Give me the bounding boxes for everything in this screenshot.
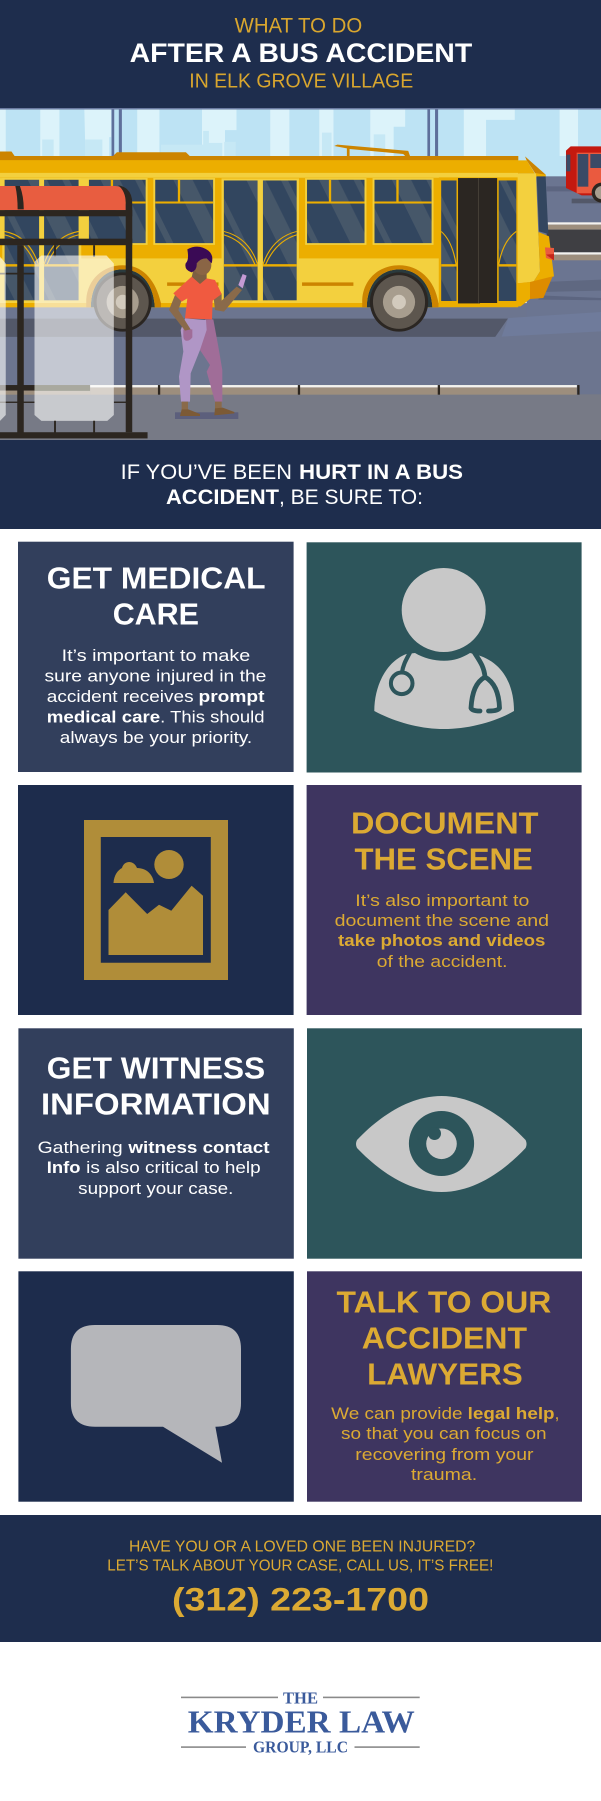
yellow trolley bus (0, 145, 518, 332)
background road and barrier, right side (502, 176, 601, 337)
logo: the kryder law group: THE (283, 1688, 318, 1707)
body text: witness contact (127, 1138, 270, 1157)
body text: always be your priority. (60, 728, 252, 747)
heading: DOCUMENT (351, 805, 539, 840)
body text (44, 646, 266, 747)
heading (351, 805, 539, 876)
footer call to action (0, 1515, 601, 1642)
heading: CARE (113, 597, 199, 632)
heading (336, 1285, 551, 1392)
body text: so that you can focus on (341, 1424, 547, 1443)
phone (238, 274, 247, 288)
body text: of the accident. (377, 952, 508, 971)
icon: framed picture (84, 820, 228, 980)
body text: document the scene and (335, 911, 549, 930)
body text: . This should (160, 708, 264, 727)
window arcs (5, 231, 297, 264)
header banner (0, 0, 601, 108)
body text: legal help (468, 1404, 555, 1423)
call to action text (107, 1538, 493, 1574)
logo: the kryder law group: GROUP, LLC (253, 1738, 348, 1757)
bus front end (480, 156, 554, 307)
panel: get witness information (18, 1028, 294, 1259)
body text: take photos and videos (338, 931, 545, 950)
roof equipment (334, 145, 410, 156)
heading (47, 561, 266, 632)
body text: prompt (198, 687, 265, 706)
panel: doctor icon (307, 542, 582, 772)
arms (169, 287, 242, 331)
body text: is also critical to help (86, 1158, 261, 1177)
body text: It’s also important to (355, 891, 529, 910)
heading: LAWYERS (367, 1357, 523, 1392)
heading: TALK TO OUR (336, 1285, 551, 1320)
legs (200, 319, 222, 402)
heading: ACCIDENT (362, 1321, 527, 1356)
title line: what to do: WHAT TO DO (235, 14, 362, 37)
illustration: bus stop scene (0, 108, 601, 441)
body text (331, 1404, 559, 1484)
heading: THE SCENE (354, 841, 533, 876)
title line: after a bus accident: AFTER A BUS ACCIDENT (130, 38, 472, 68)
body text: sure anyone injured in the (44, 667, 266, 686)
curb (0, 385, 580, 395)
sky and skyline (0, 108, 601, 176)
body text: , (555, 1404, 559, 1423)
body text: support your case. (78, 1179, 233, 1198)
body text: medical care (47, 708, 160, 727)
door (439, 177, 518, 305)
logo: the kryder law group (181, 1688, 420, 1757)
call to action text: HAVE YOU OR A LOVED ONE BEEN INJURED? (129, 1538, 476, 1555)
heading: INFORMATION (41, 1087, 271, 1122)
body text: Gathering (38, 1138, 123, 1157)
band: intro text: IF YOU’VE BEEN (121, 459, 292, 484)
body text: accident receives (47, 687, 194, 706)
red bus in the distance (566, 146, 601, 203)
glass panels (34, 256, 114, 421)
icon: speech bubble (71, 1325, 241, 1463)
wheel arches (367, 269, 432, 307)
body text: trauma. (411, 1465, 477, 1484)
icon: eye (356, 1096, 527, 1192)
windows (0, 178, 434, 302)
shirt (173, 277, 222, 319)
panel: document the scene (307, 785, 582, 1015)
ground shadow (175, 412, 238, 419)
wheel: front (370, 272, 428, 332)
body text: Info (47, 1158, 80, 1177)
panel: photo icon (18, 785, 294, 1015)
head (194, 258, 212, 275)
band: intro text: HURT IN A BUS (299, 459, 463, 484)
panel: talk to our accident lawyers (307, 1271, 582, 1502)
shoes (182, 402, 222, 410)
heading: GET WITNESS (47, 1051, 265, 1086)
panel: eye icon (307, 1028, 582, 1259)
wheel: rear (94, 272, 152, 332)
bus body (0, 156, 518, 307)
body text: It’s important to make (62, 646, 250, 665)
band: intro text (0, 440, 601, 529)
body text: We can provide (331, 1404, 463, 1423)
bus shelter (0, 185, 148, 438)
band: intro text: , BE SURE TO: (279, 484, 423, 509)
neck (192, 270, 207, 285)
phone number: (312) 223-1700 (172, 1581, 429, 1618)
body text (38, 1138, 270, 1198)
body text: recovering from your (355, 1445, 534, 1464)
panel: get medical care (18, 542, 294, 772)
person holding a phone (169, 247, 247, 419)
band: intro text: ACCIDENT (166, 484, 279, 509)
icon: doctor with stethoscope (374, 568, 514, 729)
panel: speech bubble icon (18, 1271, 294, 1502)
heading: GET MEDICAL (47, 561, 266, 596)
side panels (302, 282, 353, 286)
logo: the kryder law group: KRYDER LAW (188, 1704, 415, 1740)
call to action text: LET’S TALK ABOUT YOUR CASE, CALL US, IT’S FREE! (107, 1557, 493, 1574)
heading (41, 1051, 271, 1122)
trim (1, 258, 438, 259)
body text (335, 891, 549, 971)
title line: in elk grove village: IN ELK GROVE VILLAGE (189, 70, 413, 92)
road (0, 303, 601, 441)
